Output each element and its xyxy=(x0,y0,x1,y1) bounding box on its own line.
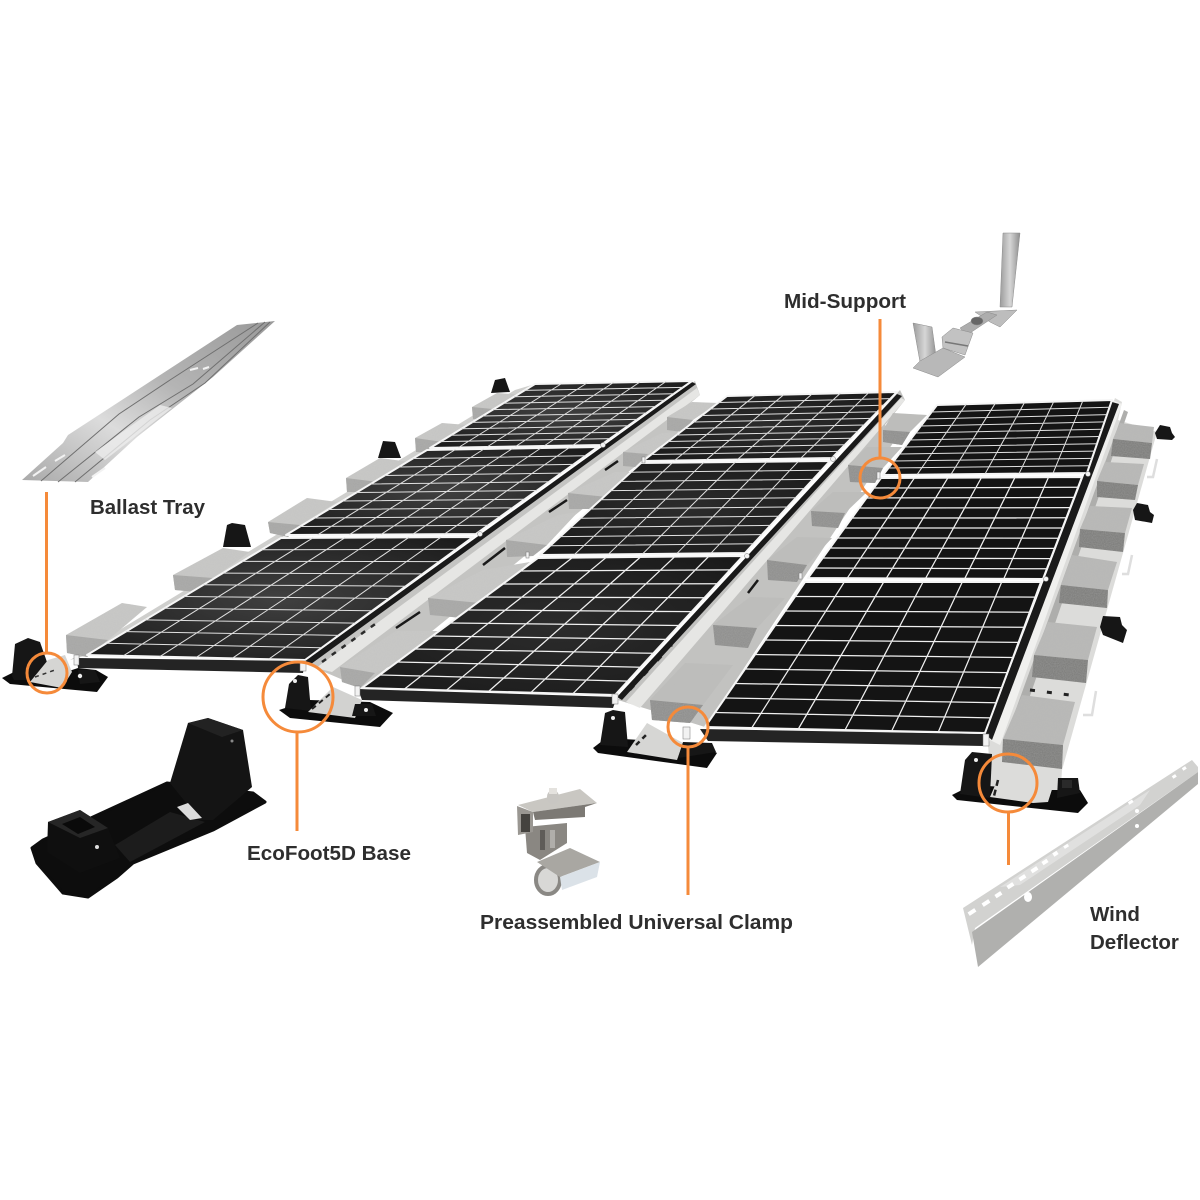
callout: universal clamp circle and leader xyxy=(668,707,708,895)
solar panel A2 xyxy=(286,447,598,535)
module clamps xyxy=(74,442,1090,746)
label: EcoFoot5D Base: EcoFoot5D Base xyxy=(247,842,411,865)
icon: ballast tray product xyxy=(22,321,275,482)
label: Ballast Tray: Ballast Tray xyxy=(90,496,206,519)
concrete ballast blocks xyxy=(66,393,1154,769)
icon: wind deflector product xyxy=(963,760,1198,967)
foot: clamp position xyxy=(593,710,717,768)
solar array assembly xyxy=(2,378,1175,813)
solar panel C1 xyxy=(705,582,1041,733)
label: Preassembled Universal Clamp: Preassembled Universal Clamp xyxy=(480,911,793,934)
solar panel B3 xyxy=(643,392,897,461)
icon: mid-support product xyxy=(913,233,1020,377)
callout: wind deflector circle and leader xyxy=(979,754,1037,865)
callout: ballast tray circle and leader xyxy=(27,492,67,693)
foot: wind deflector position xyxy=(952,752,1088,813)
far feet xyxy=(223,378,1175,643)
solar panel B1 xyxy=(362,556,743,695)
solar panel C2 xyxy=(808,477,1082,579)
icon: EcoFoot5D base product xyxy=(32,718,265,897)
callout: EcoFoot5D base circle and leader xyxy=(263,662,333,831)
solar panel B2 xyxy=(540,461,830,555)
label: Wind Deflector: Deflector xyxy=(1090,931,1179,954)
foot: front left with ballast tray xyxy=(2,638,108,692)
solar panel C3 xyxy=(883,400,1112,475)
icon: preassembled universal clamp product xyxy=(517,788,600,894)
callout: mid-support circle and leader xyxy=(860,319,900,498)
solar panel A1 xyxy=(87,537,473,660)
label: Wind Deflector: Wind xyxy=(1090,903,1140,926)
panel front frames xyxy=(77,382,1119,746)
foot: EcoFoot position xyxy=(279,675,393,727)
label: Mid-Support: Mid-Support xyxy=(784,290,906,313)
solar panel A3 xyxy=(430,381,692,448)
rails and ballast trays xyxy=(70,381,1157,800)
